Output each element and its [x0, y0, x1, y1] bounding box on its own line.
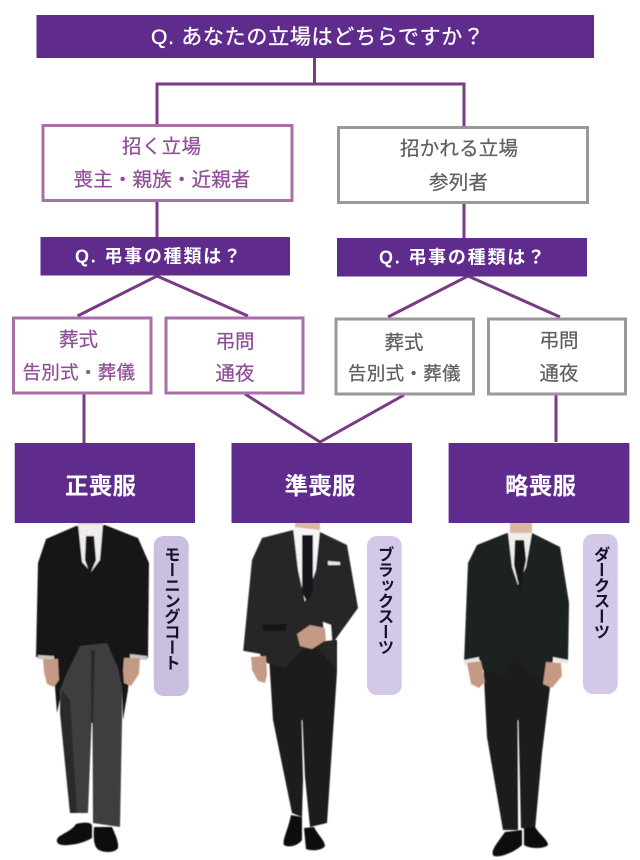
category: formal mourning: 正喪服: [65, 473, 136, 499]
box: host funeral: 告別式・葬儀: [22, 362, 135, 383]
category: semi-formal mourning: [232, 443, 412, 523]
label: black suit: [367, 536, 402, 695]
question: service type, guest: [337, 238, 587, 276]
connector lines: [78, 58, 560, 443]
category: formal mourning: [15, 443, 195, 523]
question: position: Q. あなたの立場はどちらですか？: [151, 26, 484, 49]
box: guest funeral: [336, 319, 474, 394]
figure: dark suit: [464, 520, 569, 856]
box: guest side: [338, 128, 588, 202]
box: guest funeral: 告別式・葬儀: [348, 363, 460, 384]
question: service type, host: Q. 弔事の種類は？: [75, 246, 241, 266]
category: informal mourning: [449, 443, 629, 523]
box: guest wake: 弔問: [540, 330, 578, 352]
label: black suit: ブラックスーツ: [375, 545, 393, 655]
box: host funeral: 葬式: [59, 329, 98, 351]
box: host side: 招く立場: [122, 136, 201, 158]
question: service type, host: [40, 237, 290, 276]
label: morning coat: モーニングコート: [162, 546, 181, 670]
box: host wake: 弔問: [216, 331, 254, 353]
box: host side: 喪主・親族・近親者: [74, 169, 250, 191]
box: host wake: 通夜: [216, 363, 254, 385]
question: service type, guest: Q. 弔事の種類は？: [379, 248, 545, 268]
box: guest side: 参列者: [429, 172, 488, 194]
box: guest funeral: 葬式: [384, 332, 424, 354]
box: guest wake: [488, 319, 626, 394]
label: dark suit: ダークスーツ: [591, 545, 610, 639]
label: morning coat: [154, 536, 189, 696]
box: guest wake: 通夜: [540, 363, 578, 385]
figure: morning coat: [36, 520, 149, 852]
category: informal mourning: 略喪服: [505, 473, 576, 499]
figure: black suit: [243, 520, 358, 850]
box: host side: [43, 126, 292, 200]
box: guest side: 招かれる立場: [400, 138, 518, 160]
box: host funeral: [14, 318, 151, 393]
label: dark suit: [583, 534, 618, 694]
box: host wake: [166, 318, 303, 393]
question: position: [36, 15, 594, 58]
category: semi-formal mourning: 準喪服: [284, 473, 356, 499]
